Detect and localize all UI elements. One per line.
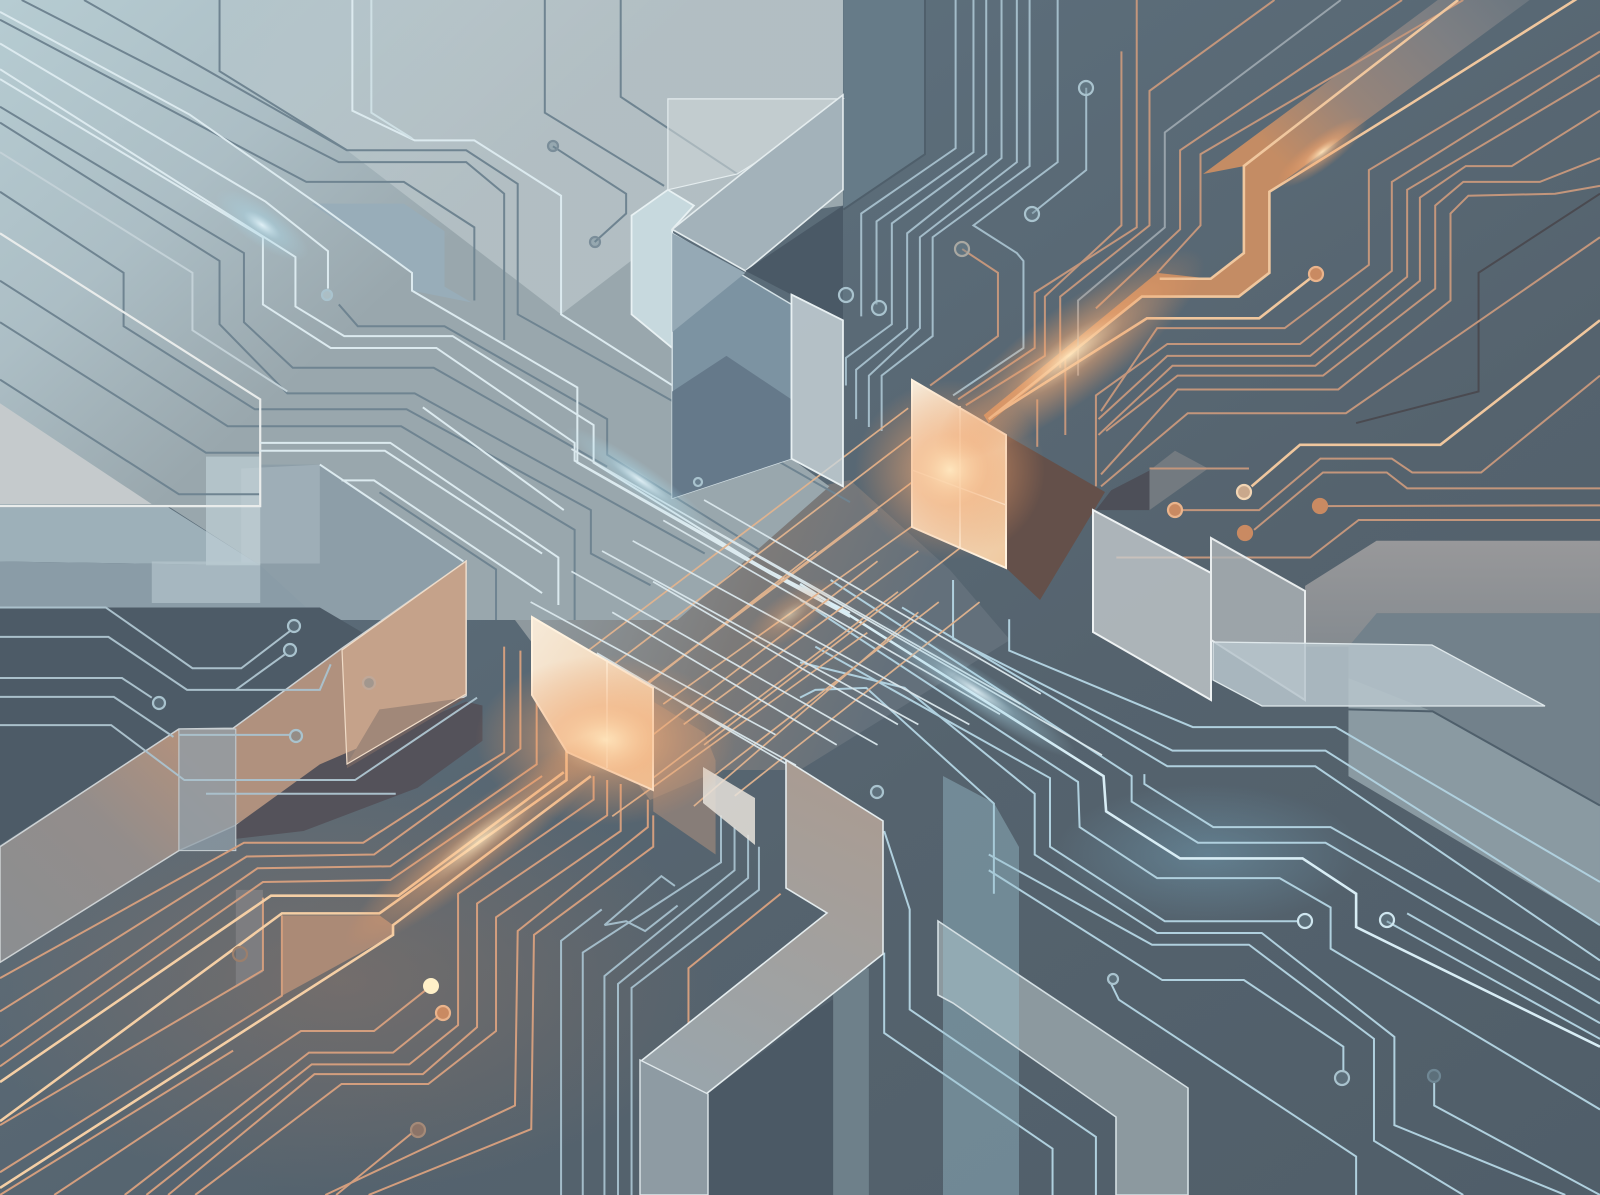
panel: glass square wide: [241, 465, 320, 563]
panel: glass box light facet: [672, 233, 745, 332]
glow: lower right blue streak: [863, 608, 1087, 772]
panel: left bright strip: [632, 190, 694, 348]
panel: dark shadow below bottom bend: [707, 1000, 832, 1195]
glow: warm floor lower left: [0, 770, 720, 1190]
panel: right upper gray: [1305, 541, 1600, 647]
panels: lower left fields: [0, 561, 716, 996]
glow: left cube: [475, 655, 735, 825]
glow: lower left streak: [325, 709, 635, 971]
traces: orange lines: [930, 0, 1600, 558]
traces: blue bottom lines: [561, 815, 759, 1195]
traces: orange lines: [0, 647, 781, 1195]
glow: center yellow patch: [732, 565, 848, 665]
panels: upper left fields: [0, 0, 843, 620]
panel: right glass slab two: [1211, 538, 1305, 700]
panels: upper center glass: [632, 95, 843, 498]
panel: glass box: [672, 233, 791, 498]
traces: dark gray group: [0, 0, 850, 620]
traces: bright orange lines: [989, 0, 1600, 486]
panel: bottom pale column: [833, 968, 869, 1195]
panel: stepped block: [260, 465, 466, 620]
panel: right dim block: [1348, 613, 1600, 806]
panel: inner darker plate: [312, 204, 472, 302]
panel: right pale wedge: [1213, 642, 1545, 706]
panel: brown cube: [1006, 435, 1105, 600]
panels: upper right warm band: [843, 0, 1530, 510]
panel: bottom band outline: [938, 921, 1188, 1195]
glow: blue bloom: [1055, 784, 1361, 925]
panel: top pale plane: [220, 0, 843, 314]
panel: top pale glass: [668, 99, 843, 190]
traces: pale lines on dark field: [0, 607, 477, 794]
icons: blue gray circuit terminals: [153, 81, 1440, 1085]
panel: gray triangle by terminals: [1149, 451, 1208, 510]
trace grid: center orange lines: [571, 408, 980, 816]
panel: bottom bend band: [641, 760, 883, 1094]
panel: glass square low: [152, 561, 260, 603]
panel: bottom dark column: [800, 1000, 833, 1195]
panel: top facet: [672, 95, 843, 271]
panel: gray glass rect: [179, 729, 236, 851]
traces: blue verticals: [843, 0, 1086, 431]
icons: orange circuit terminals: [233, 267, 1327, 1137]
icon: glowing terminal: [423, 978, 439, 994]
trace: bright blue line: [800, 584, 1600, 1047]
panel: dark facet: [745, 206, 843, 320]
panel: left gray triangle: [0, 403, 152, 504]
glow: upper left blue spark: [205, 177, 319, 273]
panel: lighter brown step: [347, 698, 466, 768]
panel: warm diagonal band: [984, 0, 1530, 423]
panels: lower right fields: [800, 541, 1600, 1195]
panel: bottom vertical glass column: [943, 776, 1019, 1195]
glow: upper right spark: [1268, 106, 1376, 198]
decorative mullion: [959, 406, 961, 548]
traces: top center and upper right: [843, 0, 1600, 558]
panel: blue gray strip: [843, 0, 925, 210]
traces: bright orange lines: [0, 706, 591, 1188]
panel: warm panel beside cube: [653, 702, 716, 855]
panel: glass slab: [791, 295, 843, 486]
panel: dark field: [0, 607, 363, 845]
panel: main light field: [0, 0, 843, 620]
traces: pale blue group: [0, 0, 850, 617]
panel: faint column: [236, 890, 263, 988]
traces: lower left: [0, 607, 781, 1195]
glow: upper right streak: [911, 219, 1229, 491]
panel: glass square column: [206, 457, 260, 565]
panel: small cream slab: [703, 767, 755, 845]
panel: warm floor: [282, 915, 393, 996]
panel: right slate block: [1348, 678, 1600, 925]
panel: mid left band: [0, 507, 260, 565]
panel: bottom right band: [938, 921, 1188, 1195]
panel: glass box dark facet: [672, 356, 791, 498]
trace grid: center pale lines: [531, 449, 1102, 776]
panel: orange glass face: [342, 561, 466, 764]
panel: center crossing floor: [470, 480, 1010, 800]
traces: upper left: [0, 0, 850, 620]
panel: dark wedge: [1096, 471, 1149, 510]
panel: lower left band: [0, 561, 320, 620]
panel: bottom bend column: [640, 1060, 708, 1195]
panel: right glass slab one: [1093, 510, 1211, 700]
panel: glowing cube right of center: [912, 380, 1006, 568]
glow: right cube: [855, 380, 1045, 560]
glow: center blue streak: [557, 415, 723, 545]
panel: beige band: [0, 561, 466, 962]
traces: blue lines: [800, 580, 1600, 1195]
panel: glowing cube left of center: [532, 617, 653, 790]
panel: dark brown shadow: [236, 702, 482, 839]
traces: lower right: [800, 580, 1600, 1195]
